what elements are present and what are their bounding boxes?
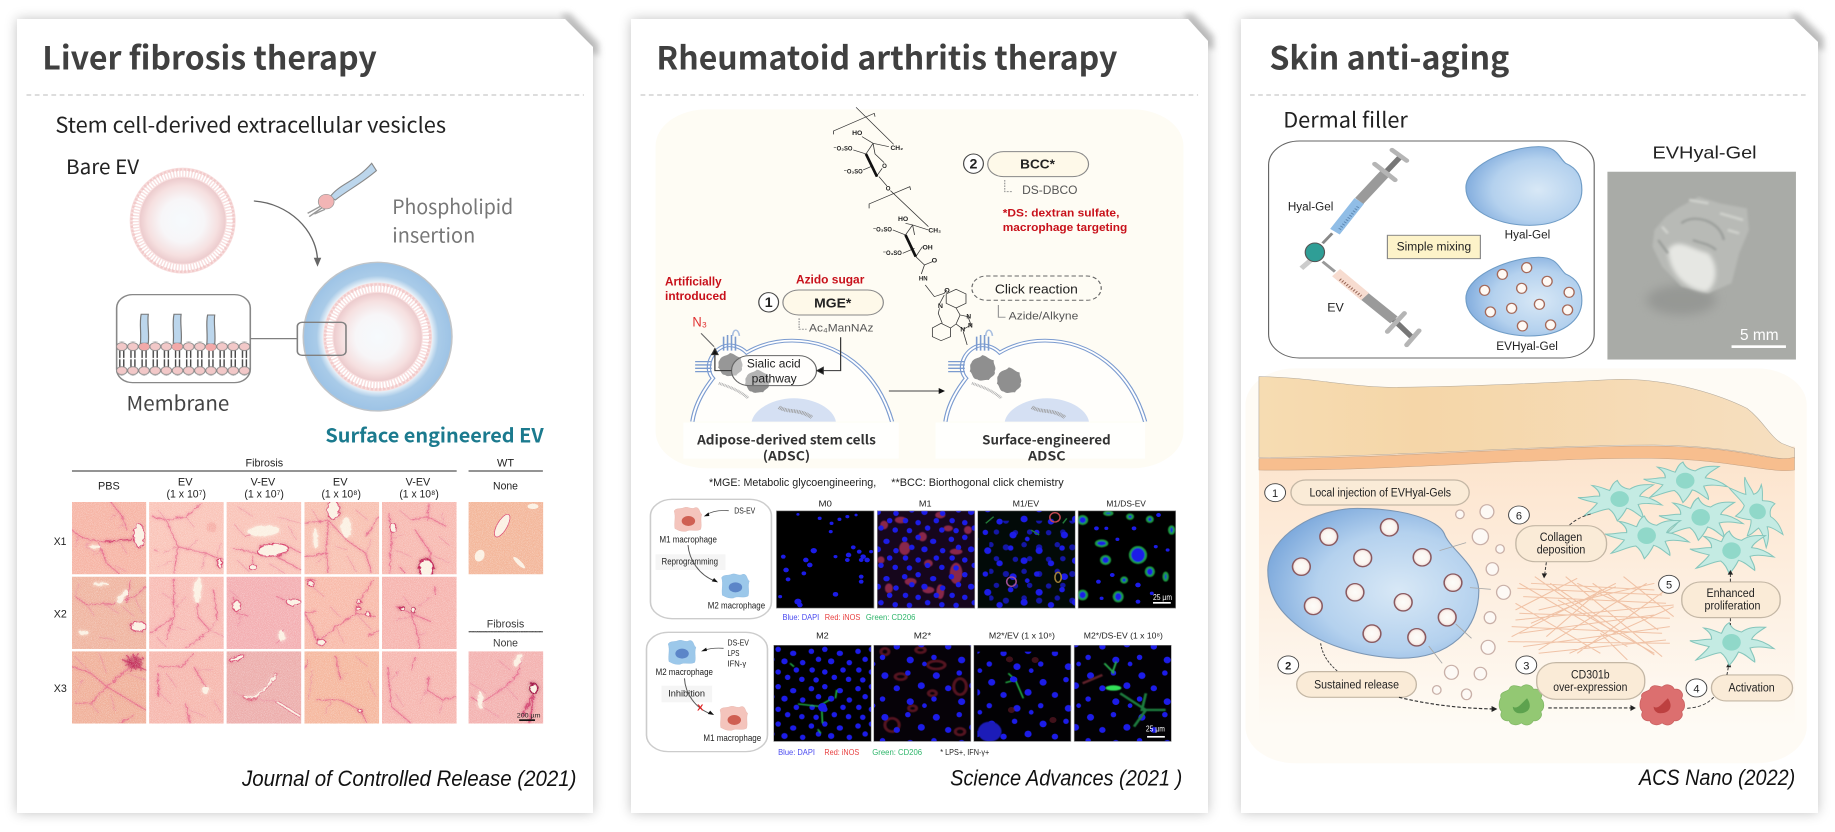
step 1: local injection: 1 (1272, 487, 1278, 500)
schematic: M2 to M1 inhibition: Inhibition (668, 689, 705, 699)
chemical structure: DS-DBCO: O (886, 186, 890, 192)
group headers: PBS (98, 479, 120, 492)
label: artificially introduced: Artificially (665, 275, 722, 288)
panel titles row 1: M1/EV (1013, 499, 1040, 508)
arrow: activation of macrophage (1548, 705, 1636, 711)
chemical structure: DS-DBCO: ⁻O₃SO (883, 250, 902, 257)
fluorescence: M0 (776, 510, 874, 608)
chemical structure: DS-DBCO: N (938, 303, 943, 310)
micrograph: V-EV 1e7 X2 (226, 576, 302, 649)
chemical structure: DS-DBCO: ⁻O₃SO (844, 169, 863, 175)
heading: Liver fibrosis therapy (42, 33, 377, 79)
label: artificially introduced: introduced (665, 289, 726, 303)
simple mixing box (1387, 235, 1480, 259)
schematic: M1 to M2 reprogramming (650, 499, 771, 619)
heading: Skin anti-aging (1269, 32, 1510, 79)
schematic: M2 to M1 inhibition: M2 macrophage (656, 668, 713, 678)
label: phospholipid insertion: insertion (392, 220, 475, 249)
mixing schematic box (1269, 141, 1594, 358)
label: N3: N₃ (692, 315, 707, 330)
schematic: M2 to M1 inhibition (646, 632, 767, 752)
label: artificially introduced (665, 275, 726, 303)
step 1: MGE: MGE* (814, 296, 852, 311)
heading: Rheumatoid arthritis therapy (656, 33, 1117, 79)
schematic: M1 to M2 reprogramming: DS-EV (734, 506, 756, 516)
icon: bare EV vesicle (130, 168, 236, 274)
subheading: Dermal filler (1283, 102, 1408, 134)
group headers: X1 (54, 535, 67, 548)
panel: skin anti-aging (1241, 13, 1824, 813)
chemical structure: DS-DBCO: ⁻O₃SO (873, 227, 892, 233)
chemical structure: DS-DBCO: HO (852, 130, 862, 137)
lower figure: mechanism in skin (1245, 368, 1807, 791)
arrows: metabolic route (701, 333, 841, 374)
group headers: (1 x 10⁸) (399, 487, 439, 500)
photo: EVHyal-Gel sample: 5 mm (1740, 325, 1779, 344)
citation: Journal of Controlled Release (2021) (241, 767, 576, 791)
histology figure (54, 457, 576, 791)
step 2: sustained release: Sustained release (1314, 678, 1399, 691)
group headers: (1 x 10⁷) (244, 487, 284, 500)
legend row 2: Red: iNOS (824, 748, 859, 758)
note: dextran sulfate: macrophage targeting (1003, 221, 1127, 234)
schematic: M2 to M1 inhibition: IFN-γ (728, 659, 746, 669)
micrograph: EV 1e8 X2 (304, 576, 380, 649)
arrow: to surface-engineered (889, 388, 945, 394)
note: dextran sulfate: *DS: dextran sulfate, (1003, 207, 1119, 219)
upper figure: dermal filler (1250, 32, 1808, 360)
micrograph: EV 1e7 X2 (149, 576, 224, 649)
released vesicles (1429, 505, 1510, 700)
legend row 1: Red: iNOS (825, 613, 860, 623)
group headers: EV (333, 475, 348, 488)
cream background panel (656, 109, 1183, 468)
icon: fibroblast cluster (1578, 462, 1790, 574)
chemical structure: DS-DBCO: HN (919, 276, 928, 282)
panel titles row 2: M2 (816, 631, 829, 640)
micrograph: V-EV 1e8 X1 (382, 502, 457, 574)
schematic: M2 to M1 inhibition: LPS (728, 649, 739, 659)
micrograph: PBS X2 (72, 576, 146, 649)
micrograph grid (72, 501, 543, 724)
chemical structure: DS-DBCO: O (944, 288, 950, 294)
step 4: activation (1686, 675, 1792, 708)
group headers: None (493, 479, 518, 492)
icon: EV syringe (1336, 273, 1419, 345)
subheading: Stem cell-derived extracellular vesicles (55, 108, 446, 139)
arrow: to fibroblast (1726, 662, 1731, 675)
micrograph: PBS X1 (72, 502, 146, 574)
panel titles row 2: M2* (914, 631, 932, 640)
schematic: M1 to M2 reprogramming: M1 macrophage (660, 535, 717, 545)
step 3: CD301b over-expression: CD301b (1571, 668, 1610, 681)
gel depot with vesicles (1268, 508, 1479, 658)
fluorescence: M2*/DS-EV (1074, 645, 1172, 742)
label: EVHyal-Gel: EVHyal-Gel (1496, 340, 1558, 353)
sialic acid pathway pill: pathway (752, 371, 797, 385)
step 1: MGE (759, 290, 883, 334)
step 3: CD301b over-expression (1516, 656, 1645, 699)
schematic: M2 to M1 inhibition: M1 macrophage (703, 734, 761, 744)
cell: surface-engineered ADSC (945, 330, 1145, 422)
panel titles row 1: M1/DS-EV (1106, 499, 1147, 508)
step 1: local injection (1265, 480, 1469, 505)
panel: rheumatoid arthritis therapy (631, 13, 1214, 813)
legend row 2: * LPS+, IFN-γ+ (940, 748, 990, 758)
upper illustration: ADSC surface engineering (641, 33, 1198, 468)
panel card (1241, 19, 1818, 813)
group headers: (1 x 10⁷) (166, 487, 206, 500)
inset callout line (250, 322, 346, 355)
group headers: EV (178, 475, 193, 488)
caption: adipose-derived stem cells (683, 423, 899, 465)
caption: adipose-derived stem cells: Adipose-derived stem cells (696, 430, 876, 449)
cell: adipose-derived stem cell (692, 330, 892, 422)
membrane inset (116, 295, 250, 383)
panel titles row 2: M2*/EV (1 x 10⁸) (989, 631, 1055, 640)
group headers: X3 (54, 682, 67, 695)
step 6: collagen deposition: deposition (1537, 543, 1585, 556)
chemical structure: DS-DBCO: O (932, 258, 937, 264)
step 2: sustained release (1278, 643, 1416, 697)
legend row 2 (778, 748, 990, 758)
group headers: None (493, 636, 518, 649)
micrograph: WT (468, 502, 544, 574)
schematic: M2 to M1 inhibition: X (697, 703, 704, 713)
step 2: BCC (964, 152, 1089, 197)
caption: adipose-derived stem cells: (ADSC) (763, 446, 810, 465)
group headers: Fibrosis (487, 617, 524, 630)
step 5: enhanced proliferation: proliferation (1705, 599, 1760, 612)
fluorescence: M2*/EV (974, 645, 1072, 742)
label: Hyal-Gel syringe: Hyal-Gel (1288, 200, 1333, 213)
step 2: BCC: DS-DBCO (1022, 183, 1078, 197)
step 6: collagen deposition: 6 (1516, 509, 1522, 522)
step 1: MGE: Ac₄ManNAz (809, 321, 873, 334)
label: phospholipid insertion (392, 192, 513, 249)
photo: EVHyal-Gel sample (1607, 172, 1796, 360)
skin: epidermis (1259, 377, 1794, 459)
dermis gradient (1259, 447, 1795, 727)
icon: EVHyal-Gel blob (1466, 257, 1582, 336)
legend row 1 (783, 613, 915, 623)
click reaction pill (972, 276, 1101, 322)
micrograph: EV 1e8 X3 (304, 651, 380, 724)
footnote: **BCC: Biorthogonal click chemistry (891, 476, 1064, 489)
sialic acid pathway pill: Sialic acid (747, 357, 801, 370)
chemical structure: DS-DBCO: N (960, 327, 965, 333)
group headers: WT (497, 457, 515, 469)
upper illustration: bare EV to surface engineered EV (26, 33, 584, 449)
step 5: enhanced proliferation (1659, 570, 1780, 625)
cream background (1245, 368, 1807, 763)
step 3: CD301b over-expression: over-expression (1553, 681, 1627, 694)
chemical structure: DS-DBCO: ⁻O₃SO (834, 146, 852, 152)
chemical structure: DS-DBCO: CH₂ (928, 228, 941, 234)
label: Hyal-Gel: Hyal-Gel (1505, 228, 1550, 241)
legend row 1: Blue: DAPI (783, 613, 819, 623)
footnote: *MGE: Metabolic glycoengineering, (709, 476, 876, 489)
step 5: enhanced proliferation: Enhanced (1706, 587, 1755, 600)
step 1: MGE: 1 (765, 295, 773, 311)
simple mixing box: Simple mixing (1397, 240, 1471, 253)
label: membrane: Membrane (127, 389, 229, 417)
micrograph: V-EV 1e7 X1 (226, 502, 302, 574)
caption: surface-engineered ADSC: ADSC (1027, 446, 1066, 465)
group headers: Fibrosis (246, 457, 283, 469)
micrograph: V-EV 1e8 X3 (382, 651, 457, 724)
arrow: insertion (254, 201, 320, 265)
step 6: collagen deposition (1509, 506, 1607, 578)
caption: surface-engineered ADSC: Surface-engineered (982, 430, 1111, 449)
group headers: V-EV (251, 475, 275, 488)
scale bar: 200 µm (517, 711, 541, 719)
step 5: enhanced proliferation: 5 (1666, 578, 1672, 591)
step 2: BCC: 2 (970, 157, 977, 172)
icon: surface engineered vesicle (303, 262, 452, 411)
step 3: CD301b over-expression: 3 (1523, 659, 1530, 672)
icon: activated fibroblast (1690, 623, 1774, 665)
label: phospholipid insertion: Phospholipid (392, 192, 513, 220)
label: azido sugar: Azido sugar (796, 272, 864, 286)
citation: ACS Nano (2022) (1637, 766, 1795, 791)
schematic: M1 to M2 reprogramming: M2 macrophage (708, 601, 765, 611)
group headers (54, 457, 543, 695)
chemical structure: DS-DBCO: O (882, 163, 887, 170)
collagen fibres (1508, 577, 1674, 660)
footnote (709, 476, 1064, 489)
micrograph: EV 1e7 X3 (149, 651, 224, 724)
icon: phospholipid (308, 163, 376, 217)
schematic: M2 to M1 inhibition: DS-EV (728, 638, 749, 648)
panel titles row 2 (816, 631, 1163, 640)
micrograph: PBS X3 (72, 651, 146, 724)
schematic: M1 to M2 reprogramming: Reprogramming (662, 557, 718, 567)
lower figure: macrophage reprogramming (646, 476, 1182, 791)
icon: Hyal-Gel syringe (1323, 150, 1407, 243)
step 2: sustained release: 2 (1285, 659, 1291, 672)
chemical structure: DS-DBCO: OH (922, 245, 933, 251)
step 1: local injection: Local injection of EVHyal-Gels (1309, 486, 1451, 499)
icon: Hyal-Gel blob (1466, 147, 1582, 225)
group headers: V-EV (406, 475, 430, 488)
label: bare EV: Bare EV (66, 152, 140, 180)
legend row 1: Green: CD206 (866, 613, 915, 623)
citation: Science Advances (2021 ) (950, 766, 1182, 791)
fluorescence: M1/DS-EV (1078, 510, 1176, 608)
panel: liver fibrosis therapy (17, 13, 599, 813)
micrograph: fibrosis none (468, 651, 544, 724)
caption: surface-engineered ADSC (936, 423, 1145, 465)
label: surface engineered EV: Surface engineered EV (325, 421, 544, 449)
step 2: BCC: BCC* (1020, 158, 1055, 172)
photo title: EVHyal-Gel (1652, 143, 1757, 163)
fluorescence: M1 (877, 510, 976, 608)
panel titles row 1: M1 (919, 499, 932, 508)
label: EV syringe: EV (1327, 301, 1344, 314)
micrograph: EV 1e7 X1 (149, 502, 224, 574)
skin: basal layer (1259, 446, 1794, 471)
fluorescence: M2 (773, 645, 872, 742)
chemical structure: DS-DBCO (834, 107, 973, 345)
micrograph: V-EV 1e8 X2 (382, 576, 457, 649)
step 4: activation: Activation (1728, 681, 1775, 694)
chemical structure: DS-DBCO: HO (898, 216, 908, 223)
icon: M2 macrophage green (1499, 685, 1544, 725)
chemical structure: DS-DBCO: N (966, 314, 971, 320)
fluorescence: M2* (873, 645, 972, 742)
chemical structure: DS-DBCO: CH₂ (890, 145, 903, 152)
legend row 2: Green: CD206 (872, 748, 922, 758)
group headers: (1 x 10⁸) (321, 487, 361, 500)
sialic acid pathway pill (732, 356, 817, 386)
step 4: activation: 4 (1693, 682, 1700, 695)
panel card (631, 19, 1208, 813)
arrow: release to macrophage (1399, 697, 1497, 712)
legend row 2: Blue: DAPI (778, 748, 815, 758)
panel titles row 2: M2*/DS-EV (1 x 10⁸) (1084, 631, 1163, 640)
chemical structure: DS-DBCO: N (968, 323, 973, 329)
panel titles row 1 (818, 499, 1147, 508)
click reaction pill: Click reaction (995, 281, 1078, 296)
icon: three-way connector (1301, 243, 1335, 272)
note: dextran sulfate (1003, 207, 1127, 234)
panel card (17, 19, 593, 813)
group headers: X2 (54, 607, 67, 620)
icon: activated macrophage red (1640, 685, 1685, 725)
step 6: collagen deposition: Collagen (1540, 531, 1582, 544)
click reaction pill: Azide/Alkyne (1009, 309, 1078, 322)
fluorescence: M1/EV (977, 510, 1076, 608)
micrograph: EV 1e8 X1 (304, 502, 380, 574)
panel titles row 1: M0 (818, 499, 832, 508)
micrograph: V-EV 1e7 X3 (226, 651, 302, 724)
